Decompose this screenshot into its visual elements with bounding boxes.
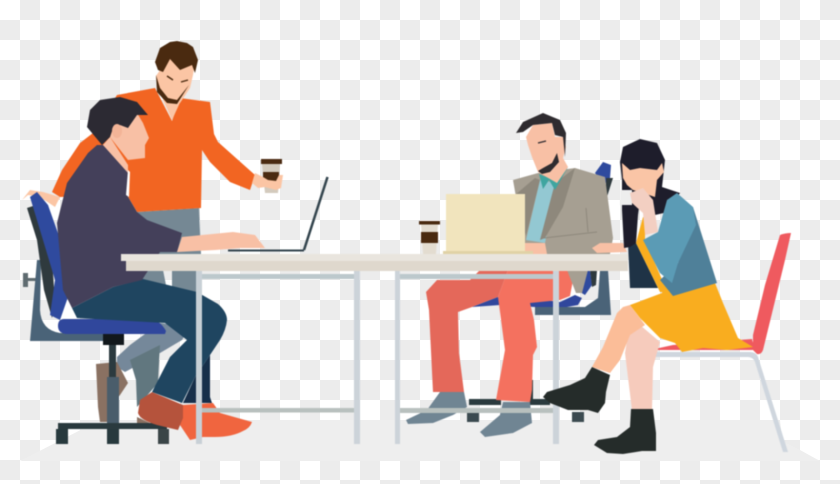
dark inner jacket: [628, 243, 658, 288]
long hair: [620, 139, 680, 248]
office chair: blue, right: [467, 162, 613, 422]
lower backrest: [580, 270, 592, 295]
red back: [753, 233, 791, 354]
crossbar top left: [200, 274, 355, 279]
neck: [157, 85, 183, 120]
base: [469, 399, 501, 405]
red seat: [650, 339, 755, 350]
face: [155, 50, 195, 103]
chair: red, right: [650, 233, 791, 452]
screen: [446, 194, 525, 251]
base: [443, 251, 533, 254]
arm and hand: [630, 188, 658, 235]
face: [526, 123, 568, 183]
hair: [87, 97, 148, 145]
right boot: [594, 409, 656, 454]
right shoe: [480, 402, 532, 437]
chair back support: [30, 260, 103, 341]
base: [228, 250, 304, 252]
cup sleeve: [263, 172, 279, 182]
lapel: [540, 168, 575, 240]
person: standing man in orange shirt: [22, 41, 255, 423]
eye: [538, 141, 546, 143]
orange shirt: [52, 88, 255, 212]
face: [622, 163, 664, 197]
crossbar top right: [400, 274, 554, 279]
jacket arm: [643, 193, 696, 283]
ear: [112, 124, 122, 138]
crossbar bottom left: [200, 408, 355, 412]
tabletop upper: [121, 254, 628, 261]
sweater: [57, 145, 182, 308]
shirt: [526, 180, 557, 243]
person: man in beige blazer: [406, 113, 613, 437]
beard: [156, 75, 189, 104]
far leg: [183, 355, 212, 403]
trousers left leg: [426, 270, 508, 392]
laptop: back of screen, right: [443, 194, 533, 254]
chair metal frame: [650, 352, 788, 452]
person: woman with blue jacket and yellow skirt: [543, 139, 753, 454]
rear knob: [23, 273, 28, 287]
coffee cup held by standing man: [252, 159, 283, 193]
collar: [126, 170, 130, 197]
face: [110, 113, 149, 160]
beard: [538, 153, 559, 174]
takeaway cup: [620, 190, 632, 205]
hand on table: [592, 243, 627, 253]
upper backrest: [595, 162, 611, 185]
cup body: [262, 164, 280, 193]
peach crossed leg: [592, 305, 645, 373]
table: [121, 254, 628, 444]
laptop: open, left: [228, 177, 328, 250]
pocket flap line: [544, 208, 597, 238]
legs: [196, 270, 202, 444]
eyes: [167, 76, 188, 82]
hair: [155, 41, 198, 73]
dark backrest: [27, 206, 55, 318]
left hand on chair: [22, 190, 60, 207]
floor shadow: [20, 420, 820, 461]
left boot: [543, 367, 610, 413]
jeans: [72, 279, 227, 403]
person: seated man in dark sweater: [57, 97, 265, 440]
blazer: [513, 168, 613, 254]
office chair: blue, left: [23, 192, 169, 444]
cup sleeve: [421, 232, 438, 243]
hand: [525, 243, 547, 254]
left shoe: [406, 392, 467, 424]
skirt: [630, 282, 753, 352]
neck: [103, 137, 128, 173]
trousers right leg: [496, 270, 573, 402]
orange shoe: [180, 403, 252, 440]
collar: [539, 167, 568, 190]
crossbar bottom right: [400, 408, 554, 413]
blue seat: [472, 295, 582, 307]
blue backrest: [30, 192, 68, 320]
cup body: [421, 224, 438, 254]
column: [103, 334, 124, 345]
forearm and hand: [177, 232, 265, 252]
tabletop lower: [126, 261, 628, 271]
screen edge: [304, 177, 328, 250]
seat: [58, 319, 166, 334]
hand: [252, 173, 283, 190]
pale leg: [625, 325, 660, 410]
jacket body: [660, 207, 717, 296]
trousers upper: [137, 208, 201, 254]
frame: [535, 270, 611, 315]
dress front: [636, 217, 668, 292]
brown shoe: [96, 362, 128, 422]
coffee cup on table: [419, 221, 440, 254]
jacket bottom: [567, 270, 588, 293]
hair: [516, 113, 566, 157]
red brown shoe: [138, 392, 183, 430]
scene: people and furniture: [22, 41, 791, 454]
trouser legs behind seated man: [117, 323, 190, 372]
cup lid: [261, 159, 282, 164]
base: [58, 423, 167, 429]
cup lid: [419, 221, 440, 224]
trousers below the table: [138, 270, 166, 285]
